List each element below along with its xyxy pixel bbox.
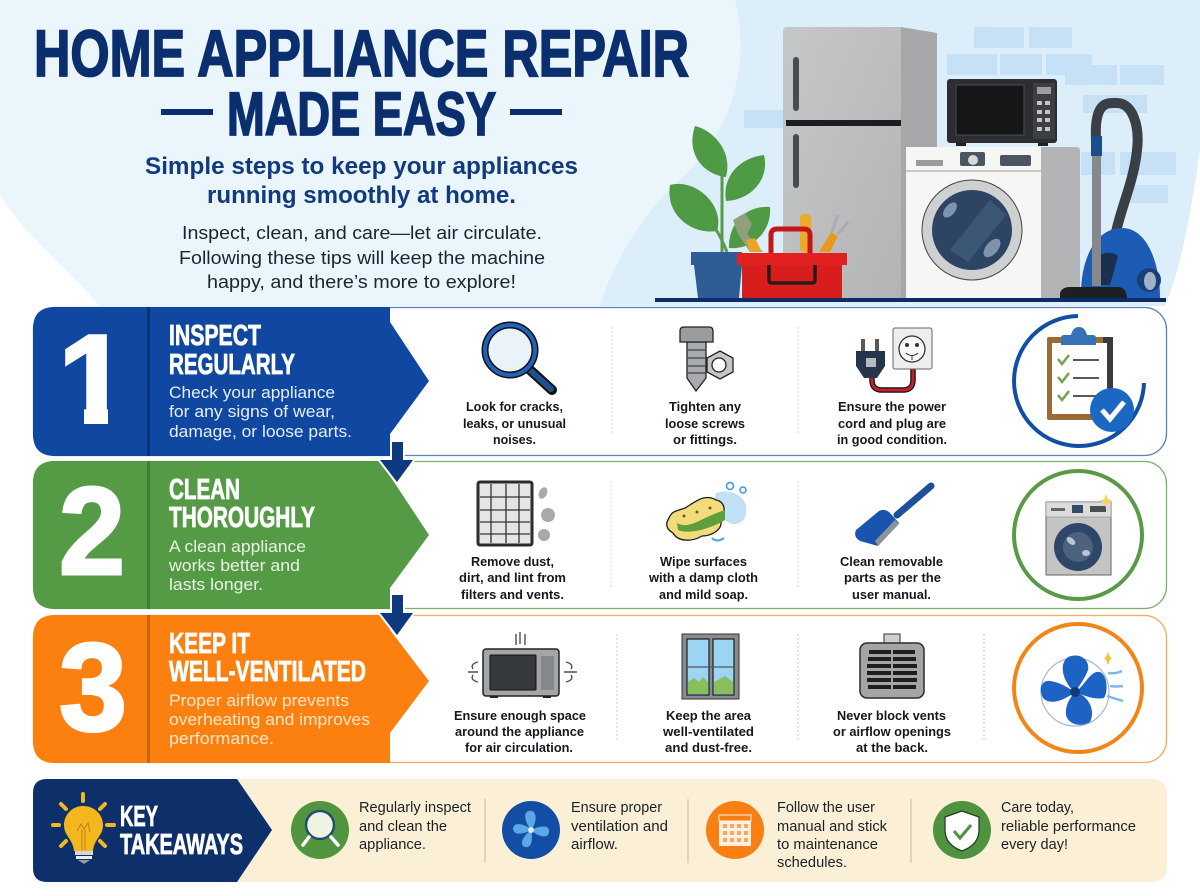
action 2 caption: well-ventilated	[662, 724, 754, 739]
illustration: appliances	[655, 27, 1166, 302]
takeaway 4	[933, 800, 1136, 859]
title: HOME APPLIANCE REPAIR	[34, 16, 689, 90]
shelf line	[655, 298, 1166, 302]
step 1 description: damage, or loose parts.	[169, 423, 352, 441]
action 3 caption: Never block vents	[837, 708, 946, 723]
step 1 description	[169, 384, 352, 441]
step 3 banner	[33, 615, 429, 763]
step 2 heading: CLEAN	[169, 474, 240, 506]
arrow: step 2 to step 3	[380, 595, 413, 635]
step 2 description: works better and	[168, 557, 300, 575]
step 3 description: overheating and improves	[169, 711, 370, 729]
intro text: happy, and there’s more to explore!	[207, 272, 516, 292]
step 1 banner	[33, 307, 429, 456]
takeaways banner	[33, 779, 272, 882]
icon: vacuum cleaner	[1060, 103, 1161, 300]
icon: microwave	[947, 79, 1057, 146]
action 1 caption: noises.	[493, 432, 536, 447]
number 1: 1	[58, 309, 129, 452]
step 2 heading: THOROUGHLY	[169, 502, 315, 534]
subtitle	[145, 153, 578, 209]
action 2 caption: or fittings.	[673, 432, 737, 447]
action 2 caption: Keep the area	[666, 708, 752, 723]
action 2 caption	[662, 708, 754, 755]
action 3 caption	[837, 399, 947, 447]
icon: microwave with airflow	[468, 632, 577, 698]
action 2 caption	[648, 554, 758, 602]
icon: magnifier	[485, 325, 552, 390]
action 1 caption	[459, 554, 566, 602]
step 1 heading	[169, 320, 295, 381]
number 2: 2	[59, 463, 125, 601]
step 3 description: Proper airflow prevents	[169, 692, 349, 710]
action 3 caption: in good condition.	[837, 432, 947, 447]
action 1 caption: Ensure enough space	[454, 708, 586, 723]
icon: scrub brush	[855, 486, 931, 546]
action 2 caption: Wipe surfaces	[660, 554, 747, 569]
step 2 banner	[33, 461, 429, 609]
action 1 caption	[463, 399, 566, 447]
action 2 caption	[665, 399, 745, 447]
action 1 caption: leaks, or unusual	[463, 416, 566, 431]
takeaway 3: manual and stick	[777, 819, 888, 835]
action 2 caption: with a damp cloth	[648, 570, 758, 585]
action 3 caption: Ensure the power	[838, 399, 946, 414]
takeaway 4: Care today,	[1001, 800, 1074, 816]
step 2 heading	[169, 474, 315, 534]
takeaway 2	[502, 800, 668, 859]
icon: sponge and bubbles	[667, 482, 746, 540]
action 1 caption: around the appliance	[455, 724, 584, 739]
takeaway 3	[706, 800, 888, 871]
icon: clipboard checklist in ring	[1014, 316, 1144, 446]
action 1 caption: filters and vents.	[461, 587, 564, 602]
takeaways heading	[120, 801, 243, 861]
takeaway 1: appliance.	[359, 837, 426, 853]
icon: red toolbox with tools	[733, 213, 848, 298]
step 3 description: performance.	[169, 730, 274, 748]
action 2 caption: loose screws	[665, 416, 745, 431]
icon: light bulb	[53, 794, 114, 864]
action 1 caption: Remove dust,	[471, 554, 554, 569]
subtitle: running smoothly at home.	[207, 182, 516, 209]
action 3 caption	[833, 708, 951, 755]
panel: step 1 inspect regularly	[33, 307, 1166, 456]
icon: window	[682, 634, 739, 699]
icon: potted plant	[669, 126, 770, 298]
icon: washing machine	[906, 147, 1080, 298]
step 1 heading: REGULARLY	[169, 349, 295, 381]
takeaway 2: airflow.	[571, 837, 618, 853]
panel: step 2 clean thoroughly	[33, 461, 1166, 609]
title	[34, 16, 689, 148]
takeaway 3: to maintenance	[777, 837, 878, 853]
takeaway 2: ventilation and	[571, 819, 668, 835]
step 3 heading: KEEP IT	[169, 628, 250, 660]
action 3 caption	[840, 554, 943, 602]
action 1 caption: dirt, and lint from	[459, 570, 566, 585]
action 3 caption: cord and plug are	[838, 416, 946, 431]
step 2 description: lasts longer.	[169, 576, 263, 594]
takeaways heading: TAKEAWAYS	[120, 829, 243, 861]
takeaway 3: schedules.	[777, 855, 847, 871]
step 2 description	[168, 538, 306, 594]
intro text	[179, 223, 545, 292]
icon: clean washer in ring	[1014, 471, 1142, 599]
icon: rear vent	[860, 634, 924, 698]
takeaway 1	[291, 800, 471, 859]
icon: plug and socket	[856, 328, 932, 390]
action 2 caption: Tighten any	[669, 399, 742, 414]
action 2 caption: and mild soap.	[659, 587, 748, 602]
action 3 caption: parts as per the	[844, 570, 941, 585]
action 1 caption: for air circulation.	[465, 740, 573, 755]
step 2 description: A clean appliance	[169, 538, 306, 556]
action 1 caption	[454, 708, 586, 755]
subtitle: Simple steps to keep your appliances	[145, 153, 578, 180]
step 1 description: Check your appliance	[169, 384, 335, 402]
step 3 heading: WELL-VENTILATED	[169, 656, 366, 688]
icon: fan in ring	[1014, 624, 1142, 752]
icon: screw and nut	[680, 327, 733, 391]
takeaway 1: and clean the	[359, 819, 447, 835]
step 1 description: for any signs of wear,	[169, 403, 335, 421]
action 3 caption: Clean removable	[840, 554, 943, 569]
icon: dusty filter	[478, 482, 555, 545]
action 2 caption: and dust-free.	[665, 740, 752, 755]
takeaways heading: KEY	[120, 801, 158, 833]
step 3 heading	[169, 628, 366, 688]
takeaway 4: reliable performance	[1001, 819, 1136, 835]
action 3 caption: or airflow openings	[833, 724, 951, 739]
intro text: Following these tips will keep the machine	[179, 248, 545, 268]
panel: key takeaways	[33, 779, 1167, 882]
number 3: 3	[59, 619, 127, 757]
takeaway 2: Ensure proper	[571, 800, 662, 816]
action 3 caption: at the back.	[856, 740, 928, 755]
step 3 description	[169, 692, 370, 748]
icon: refrigerator	[783, 27, 937, 298]
takeaway 3: Follow the user	[777, 800, 875, 816]
action 3 caption: user manual.	[852, 587, 931, 602]
intro text: Inspect, clean, and care—let air circulate.	[182, 223, 542, 243]
step 1 heading: INSPECT	[169, 320, 261, 352]
takeaway 1: Regularly inspect	[359, 800, 471, 816]
title: MADE EASY	[227, 80, 496, 148]
takeaway 4: every day!	[1001, 837, 1068, 853]
panel: step 3 keep it well-ventilated	[33, 615, 1166, 763]
action 1 caption: Look for cracks,	[466, 399, 563, 414]
arrow: step 1 to step 2	[380, 442, 413, 482]
